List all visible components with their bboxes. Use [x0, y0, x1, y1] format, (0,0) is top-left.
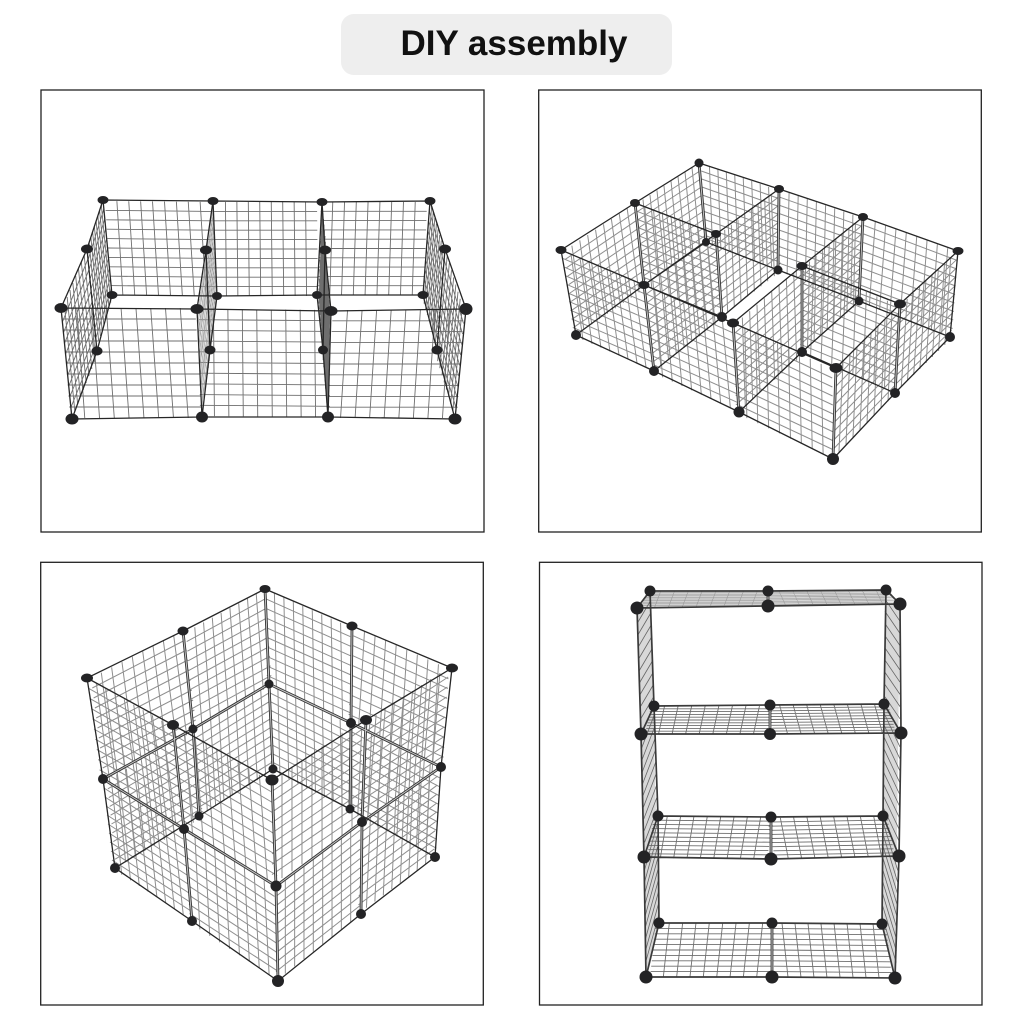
panel: four-level shelf unit — [540, 562, 982, 1005]
title: DIY assembly — [400, 24, 628, 63]
mesh shelves — [645, 704, 896, 978]
connectors — [81, 585, 458, 987]
mesh walls — [87, 589, 449, 981]
mesh top shelf — [641, 590, 897, 607]
connectors — [630, 584, 908, 984]
double-wire posts — [635, 163, 900, 459]
frame wires — [637, 590, 901, 978]
light grey shading on top shelf and side walls — [637, 590, 900, 978]
centre double-wire dividers — [768, 591, 772, 977]
panel: six-cell flat playpen, angled view — [539, 90, 981, 532]
frame wires — [61, 200, 466, 419]
frame wires — [561, 163, 958, 459]
title — [341, 14, 672, 75]
panel: six-cell flat playpen, front view — [41, 90, 484, 532]
diagonal wires on side walls — [637, 599, 900, 962]
connectors — [556, 158, 964, 465]
mesh walls — [62, 199, 464, 418]
panel: two-tier cube enclosure — [41, 562, 483, 1005]
double-wire posts and middle ring — [103, 589, 441, 981]
frame wires — [87, 589, 452, 981]
mesh walls — [562, 163, 958, 459]
connectors — [54, 196, 472, 424]
